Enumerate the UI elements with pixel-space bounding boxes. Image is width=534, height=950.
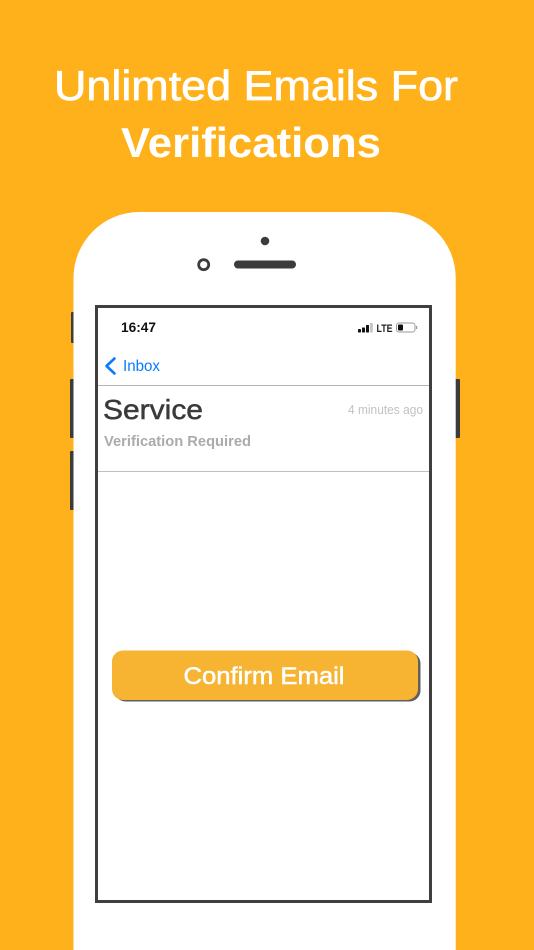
sender: Service [103,394,203,425]
button: confirm email: Confirm Email [184,663,344,690]
phone speaker [234,260,296,268]
icon: battery [396,323,417,332]
timestamp: 4 minutes ago [348,403,423,417]
button: confirm email [112,650,420,702]
divider [98,385,429,386]
title: Verifications [121,119,381,166]
icon: phone [70,212,460,950]
icon: signal bars [358,323,373,332]
back link: Inbox [123,358,160,375]
title: Unlimted Emails For [54,62,458,109]
phone side buttons [70,312,460,510]
phone camera [199,260,209,270]
status time: 16:47 [121,320,156,335]
subject: Verification Required [104,433,251,450]
icon: back chevron [106,358,114,374]
phone body [74,212,456,950]
phone sensor dot [261,237,269,245]
divider [98,471,429,472]
network label: LTE [376,323,392,335]
title [54,62,458,166]
panel: phone screen [96,306,430,902]
